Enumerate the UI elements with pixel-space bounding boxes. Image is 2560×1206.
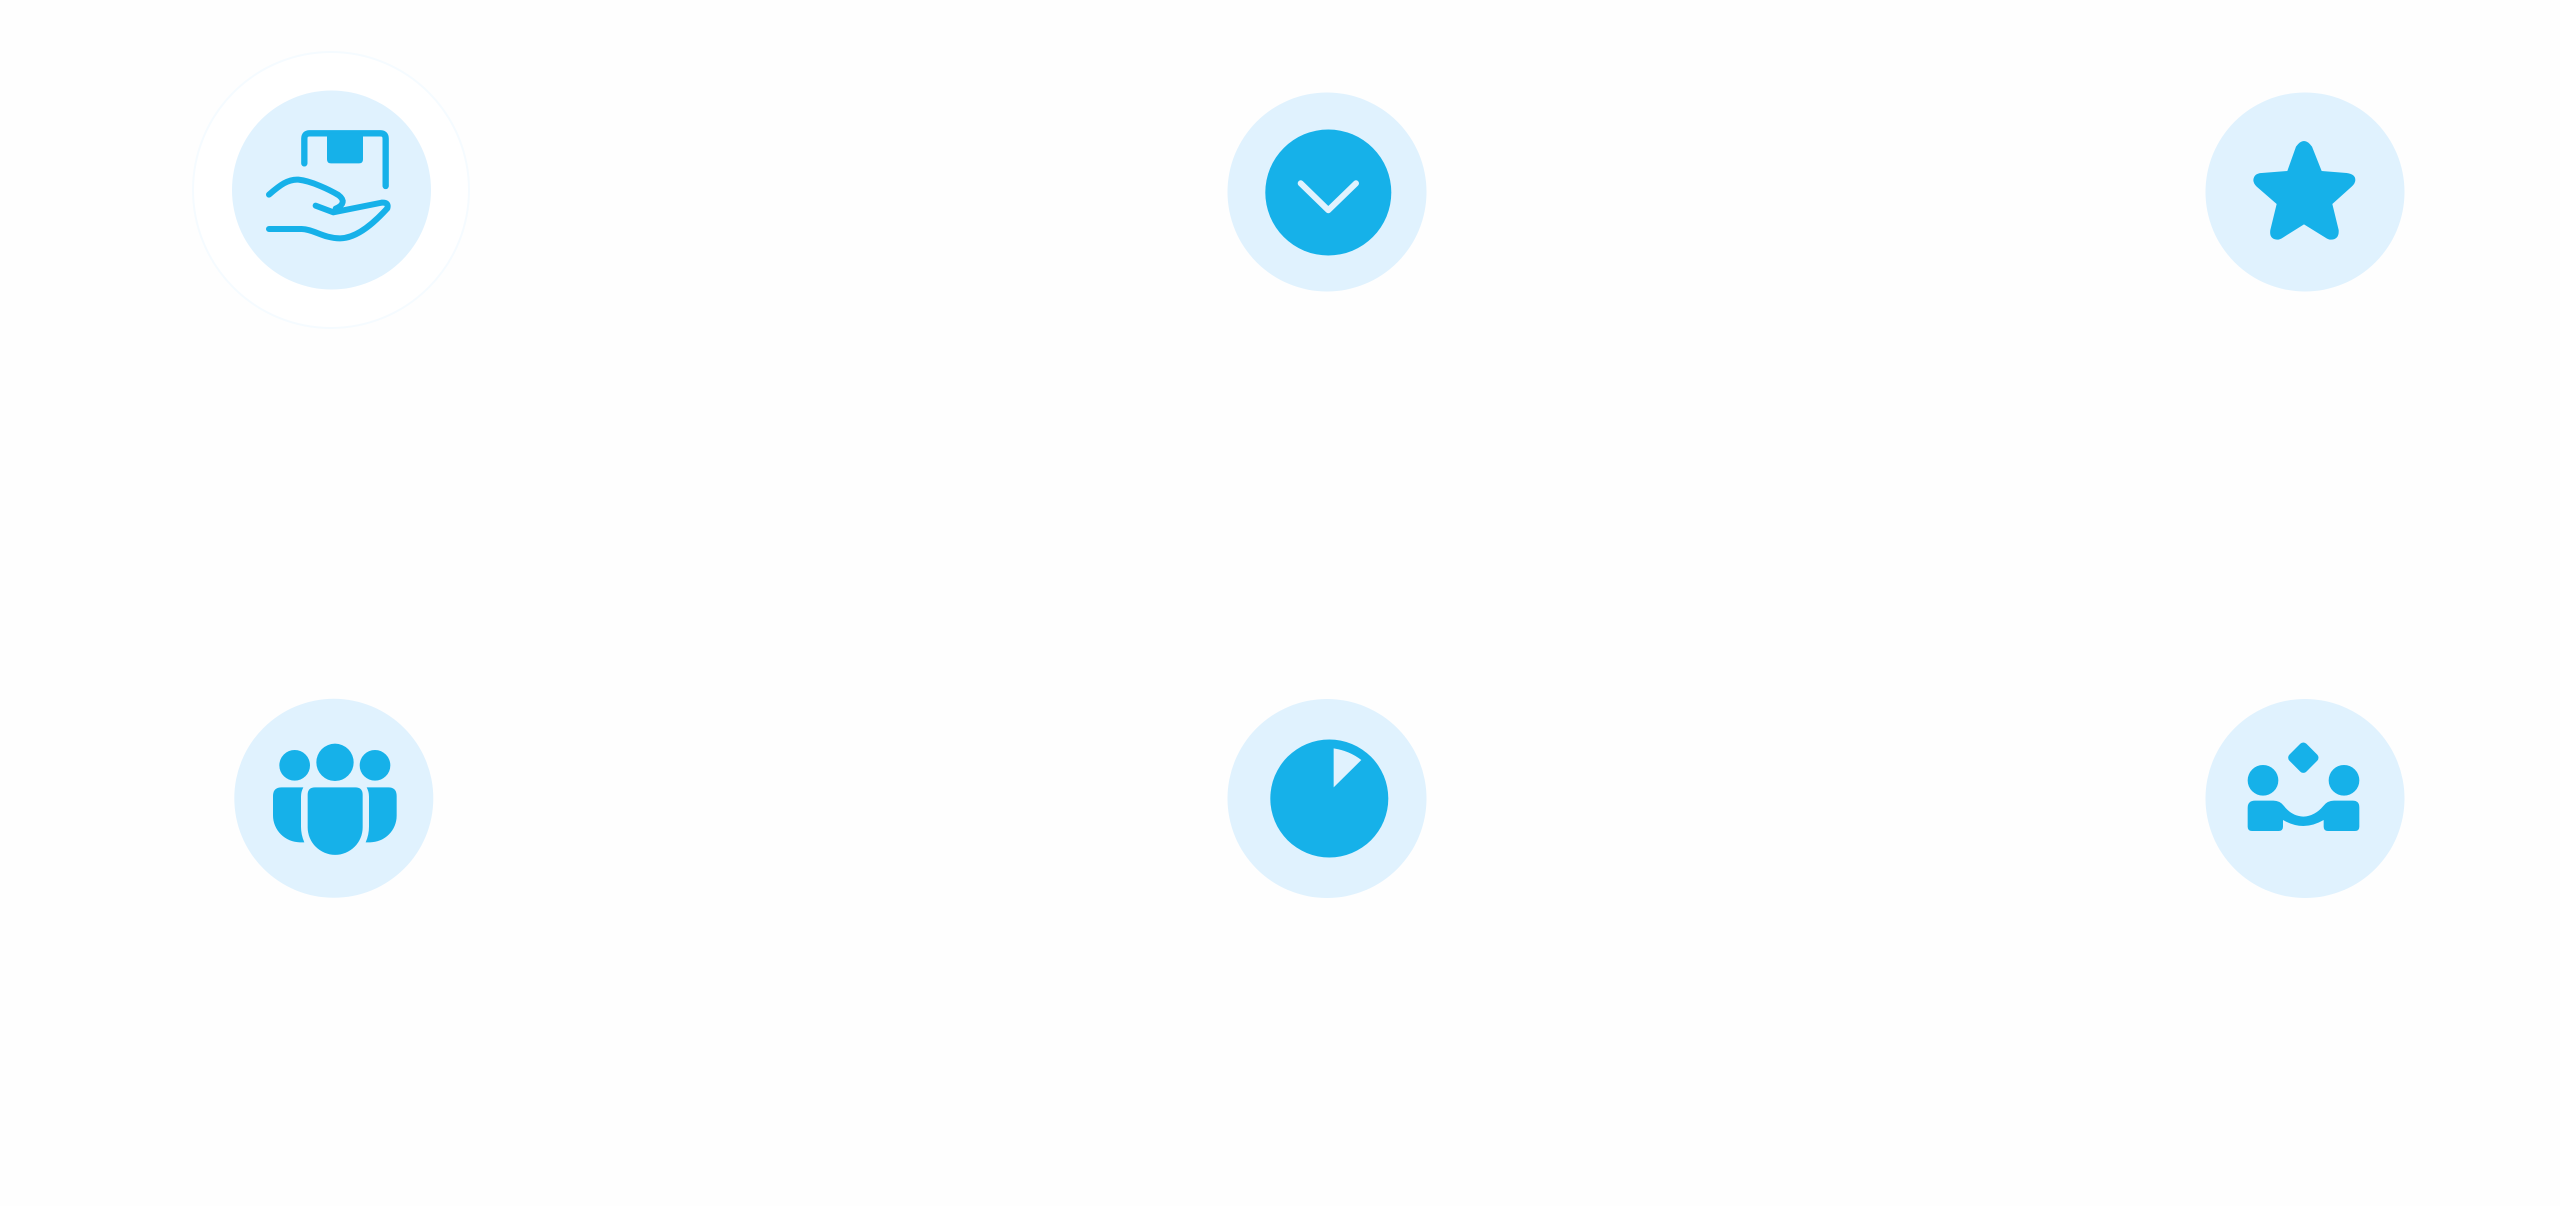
icon: pie timer <box>1228 699 1426 898</box>
icon: check badge <box>1228 92 1426 292</box>
icon: hand holding box (with outer ring) <box>193 52 469 328</box>
icon: two people handshake with diamond <box>2206 699 2404 898</box>
icon: star <box>2206 92 2404 292</box>
icon: group of three people <box>234 699 433 898</box>
